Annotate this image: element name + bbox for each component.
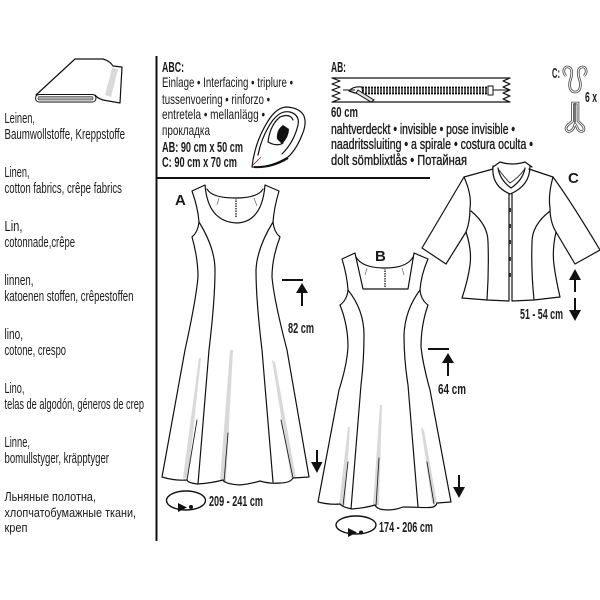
text block: fabric suggestions: linnen, <box>4 273 34 289</box>
text block: fabric suggestions: cotone, crespo <box>4 343 66 359</box>
text block: interfacing: entretela • mellanlägg • <box>162 106 265 122</box>
jacket C <box>422 162 600 301</box>
label C: C <box>568 170 579 187</box>
arrow: dress A length top <box>282 280 308 306</box>
dress A <box>162 185 309 485</box>
text block: fabric suggestions: bomullstyger, kräpptyger <box>4 451 109 467</box>
text block: interfacing: Einlage • Interfacing • triplure • <box>162 74 293 90</box>
icon: hook and eye <box>552 66 597 131</box>
icon: iron <box>252 107 305 167</box>
text block: fabric suggestions: креп <box>4 520 28 535</box>
text block: fabric suggestions: cotton fabrics, crêpe fabrics <box>4 181 122 197</box>
text block: interfacing: прокладка <box>162 122 210 138</box>
text block: zipper: nahtverdeckt • invisible • pose invisible • <box>331 122 515 138</box>
arrow: jacket length <box>569 269 581 321</box>
text block: fabric suggestions: Baumwollstoffe, Kreppstoffe <box>4 127 125 143</box>
text block: fabric suggestions: telas de algodón, géneros de crep <box>4 397 144 413</box>
text block: fabric suggestions: Linne, <box>4 435 30 451</box>
text block: fabric suggestions: cotonnade,crêpe <box>4 235 75 251</box>
jacket length label: 51 - 54 cm <box>520 307 563 323</box>
text block: fabric suggestions: lino, <box>4 327 23 343</box>
text block: zipper: dolt sömblixtlås • Потайная <box>331 153 467 169</box>
text block: fabric suggestions: Льняные полотна, <box>4 489 96 504</box>
text block: fabric suggestions <box>4 111 144 535</box>
text block: fabric suggestions: Linen, <box>4 165 29 181</box>
icon: hem circumference A <box>166 491 206 512</box>
text block: zipper <box>331 60 533 169</box>
icon: folded fabric <box>36 59 122 103</box>
arrow: dress A length bottom <box>311 450 322 473</box>
text block: fabric suggestions: Lino, <box>4 381 24 397</box>
text block: fabric suggestions: katoenen stoffen, crêpestoffen <box>4 289 134 305</box>
text block: fabric suggestions: хлопчатобумажные ткани, <box>4 505 136 520</box>
dress B length label: 64 cm <box>438 382 466 398</box>
text block: interfacing: C: 90 cm x 70 cm <box>162 155 237 171</box>
text block: interfacing <box>162 60 293 171</box>
icon: hook and eye: C: <box>552 66 560 82</box>
text block: zipper: 60 cm <box>331 105 358 121</box>
label A: A <box>175 192 186 209</box>
label B: B <box>375 248 386 265</box>
hem label A: 209 - 241 cm <box>209 494 263 510</box>
hem label B: 174 - 206 cm <box>379 520 433 536</box>
text block: fabric suggestions: Leinen, <box>4 111 35 127</box>
text block: interfacing: ABC: <box>162 60 184 76</box>
icon: zipper <box>332 78 510 102</box>
text block: fabric suggestions: Lin, <box>4 219 22 235</box>
arrow: dress B length top <box>428 349 454 376</box>
text block: zipper: naadritssluiting • a spirale • costura oculta • <box>331 137 533 153</box>
text block: interfacing: AB: 90 cm x 50 cm <box>162 140 243 156</box>
dress A length label: 82 cm <box>288 321 314 337</box>
dress B <box>318 253 451 510</box>
arrow: dress B length bottom <box>453 475 465 498</box>
text block: interfacing: tussenvoering • rinforzo • <box>162 91 270 107</box>
text block: zipper: AB: <box>331 60 346 76</box>
icon: hem circumference B <box>336 516 376 537</box>
